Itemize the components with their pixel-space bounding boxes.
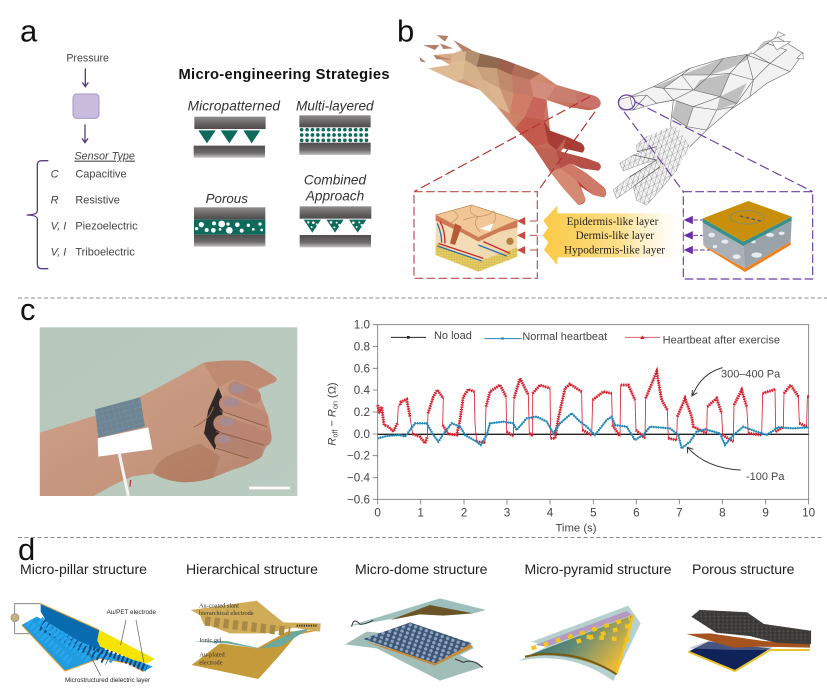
illustration: micro-pillar	[11, 604, 155, 676]
panel a: sensor types and micro-engineering strategies	[20, 14, 390, 269]
pillar labels: Au/PET electrode	[107, 609, 156, 616]
hierarchical labels: Au-plated	[199, 652, 225, 659]
arrow: pressure down	[82, 68, 88, 87]
y axis tick labels: 0.6	[354, 362, 370, 375]
structure headings	[20, 561, 795, 577]
annotation: -100 Pa: -100 Pa	[746, 471, 785, 483]
legend: Heartbeat after exercise	[663, 334, 780, 346]
x axis tick labels: 7	[676, 507, 683, 520]
y axis tick labels: 0.8	[354, 340, 370, 353]
strategy: porous: Porous	[206, 191, 248, 206]
y axis tick labels: −0.2	[347, 450, 370, 463]
y axis tick labels: 0.2	[354, 406, 370, 419]
illustration: low-poly red hand	[419, 35, 608, 207]
illustration: skin block	[436, 205, 517, 272]
pillar labels: Microstructured dielectric layer	[65, 677, 150, 684]
panel letter d: d	[18, 532, 35, 567]
arrows: skin layers	[517, 217, 537, 254]
strategy: micropatterned: Micropatterned	[188, 98, 280, 113]
illustration: hierarchical	[191, 601, 321, 679]
x axis tick labels: 1	[417, 507, 424, 520]
hierarchical labels: Au-coated slant	[199, 602, 239, 609]
panel c: wrist sensor and heartbeat chart	[20, 292, 816, 535]
x axis tick labels: 10	[802, 507, 816, 520]
sensor box	[73, 94, 99, 118]
x axis tick labels: 0	[374, 507, 381, 520]
series: no load	[378, 432, 809, 436]
pressure label: Pressure	[66, 52, 109, 64]
photo: sensor on wrist	[40, 327, 297, 496]
chart: resistance over time: (Ω)	[326, 382, 338, 401]
axis titles: Time (s)	[555, 523, 597, 535]
x axis tick labels: 8	[719, 507, 726, 520]
layer labels	[564, 216, 665, 256]
strategy: combined approach: Combined	[304, 173, 367, 188]
sensor type list: Capacitive	[75, 168, 127, 180]
chart: resistance over time: R	[326, 409, 338, 417]
y axis tick labels: 0.4	[354, 384, 371, 397]
divider	[18, 536, 822, 538]
illustration: porous	[687, 611, 810, 671]
strategies heading: Micro-engineering Strategies	[178, 67, 390, 83]
chart: resistance over time: off	[330, 429, 339, 438]
layer labels: Epidermis-like layer	[567, 216, 659, 228]
annotation: 300-400 Pa	[692, 368, 781, 396]
divider	[18, 297, 827, 299]
sensor type list: Triboelectric	[75, 247, 135, 259]
structure headings: Micro-pillar structure	[20, 561, 147, 577]
y axis tick labels: 0.0	[354, 428, 371, 441]
panel letter c: c	[20, 292, 36, 327]
x axis tick labels: 9	[762, 507, 769, 520]
illustration: micro-dome	[345, 598, 486, 681]
sensor type heading: Sensor Type	[74, 151, 135, 163]
hierarchical labels: hierarchical electrode	[199, 610, 254, 617]
annotation: -100 Pa	[687, 447, 785, 483]
sensor type list: V, I	[51, 247, 66, 259]
structure headings: Porous structure	[692, 561, 795, 577]
layer labels: Dermis-like layer	[576, 230, 654, 242]
hierarchical labels: electrode	[199, 660, 223, 667]
sensor type list: Resistive	[75, 194, 120, 206]
illustration: device block	[703, 201, 792, 272]
chart frame and ticks	[373, 325, 809, 504]
x axis tick labels: 4	[547, 507, 554, 520]
strategy diagrams	[188, 98, 374, 247]
chart: resistance over time: on	[330, 401, 339, 409]
y axis tick labels: −0.4	[347, 472, 371, 485]
sensor type list: C	[51, 168, 59, 180]
legend: Normal heartbeat	[522, 331, 607, 343]
strategy: micropatterned	[188, 98, 280, 158]
y axis tick labels: −0.6	[347, 493, 370, 506]
y axis tick labels	[347, 319, 371, 506]
x axis tick labels: 5	[590, 507, 597, 520]
chart: resistance over time: R	[326, 438, 338, 446]
sensor type list: Piezoelectric	[75, 221, 138, 233]
layer labels: Hypodermis-like layer	[564, 244, 665, 256]
panel letter a: a	[20, 14, 38, 48]
callout box: skin	[414, 192, 537, 278]
x axis tick labels: 3	[504, 507, 510, 520]
legend	[391, 330, 780, 346]
x axis tick labels: 2	[461, 507, 467, 520]
series: normal heartbeat	[378, 413, 809, 448]
x axis tick labels	[374, 507, 816, 520]
structure headings: Hierarchical structure	[186, 561, 318, 577]
arrow: yellow layer correspondence	[543, 206, 683, 265]
panel letter b: b	[397, 14, 414, 48]
annotation: 300-400 Pa: 300–400 Pa	[721, 369, 781, 381]
arrows: device layers	[684, 216, 717, 254]
strategy: combined approach	[300, 173, 371, 247]
pressure sensing flow and sensor types	[27, 52, 138, 269]
sensor type list	[51, 168, 138, 259]
illustration: wireframe hand	[610, 32, 803, 207]
strategy: multi-layered	[296, 98, 374, 155]
legend: No load	[434, 330, 472, 342]
strategy: combined approach: Approach	[305, 189, 364, 204]
structure headings: Micro-pyramid structure	[524, 561, 672, 577]
bracket	[27, 161, 48, 269]
chart: resistance over time	[326, 319, 816, 535]
structure headings: Micro-dome structure	[355, 561, 488, 577]
hierarchical labels: Ionic gel	[199, 637, 222, 644]
y axis tick labels: 1.0	[354, 319, 371, 332]
arrow: sensor down	[82, 124, 88, 143]
zoom lines and marker: purple	[618, 95, 813, 192]
zoom lines: red	[414, 97, 595, 192]
hierarchical labels	[199, 602, 254, 667]
strategy: porous	[194, 191, 265, 247]
sensor type list: R	[51, 194, 59, 206]
panel d: microstructures	[11, 532, 810, 684]
strategy: multi-layered: Multi-layered	[296, 98, 374, 113]
callout box: device	[683, 192, 813, 279]
panel b: skin-like sensor	[397, 14, 813, 279]
illustration: micro-pyramid	[518, 606, 641, 681]
series: heartbeat after exercise	[378, 372, 809, 443]
x axis tick labels: 6	[633, 507, 640, 520]
pillar labels	[65, 609, 156, 684]
sensor type list: V, I	[51, 221, 66, 233]
chart: resistance over time: −	[326, 417, 338, 430]
